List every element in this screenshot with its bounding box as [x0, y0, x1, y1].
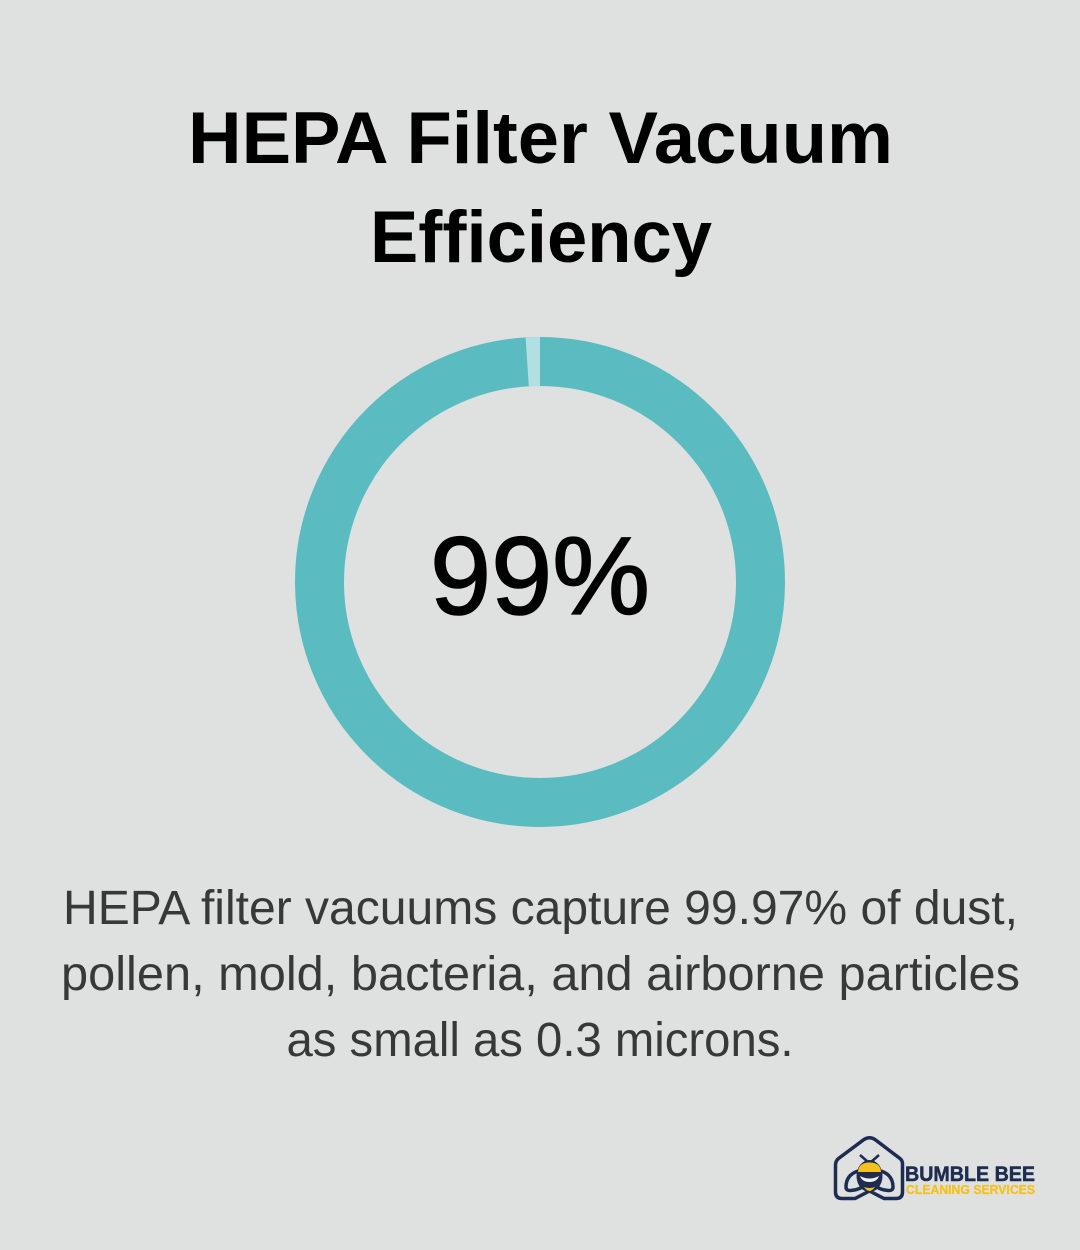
- remaining 1% segment: [526, 337, 540, 386]
- title: [188, 98, 893, 278]
- description text: [61, 882, 1020, 1067]
- description text: pollen, mold, bacteria, and airborne particles: [61, 948, 1020, 1001]
- title: HEPA Filter Vacuum: [188, 98, 893, 179]
- donut chart: 99%: [320, 337, 760, 802]
- logo wordmark: BUMBLE BEE: [905, 1163, 1035, 1186]
- description text: as small as 0.3 microns.: [286, 1014, 794, 1067]
- logo tagline: CLEANING SERVICES: [906, 1183, 1035, 1197]
- center value: 99%: [430, 515, 650, 638]
- title: Efficiency: [370, 197, 712, 278]
- description text: HEPA filter vacuums capture 99.97% of dust,: [63, 882, 1018, 935]
- logo: Bumble Bee Cleaning Services: [836, 1138, 1035, 1198]
- icon: house with bee: [836, 1138, 902, 1198]
